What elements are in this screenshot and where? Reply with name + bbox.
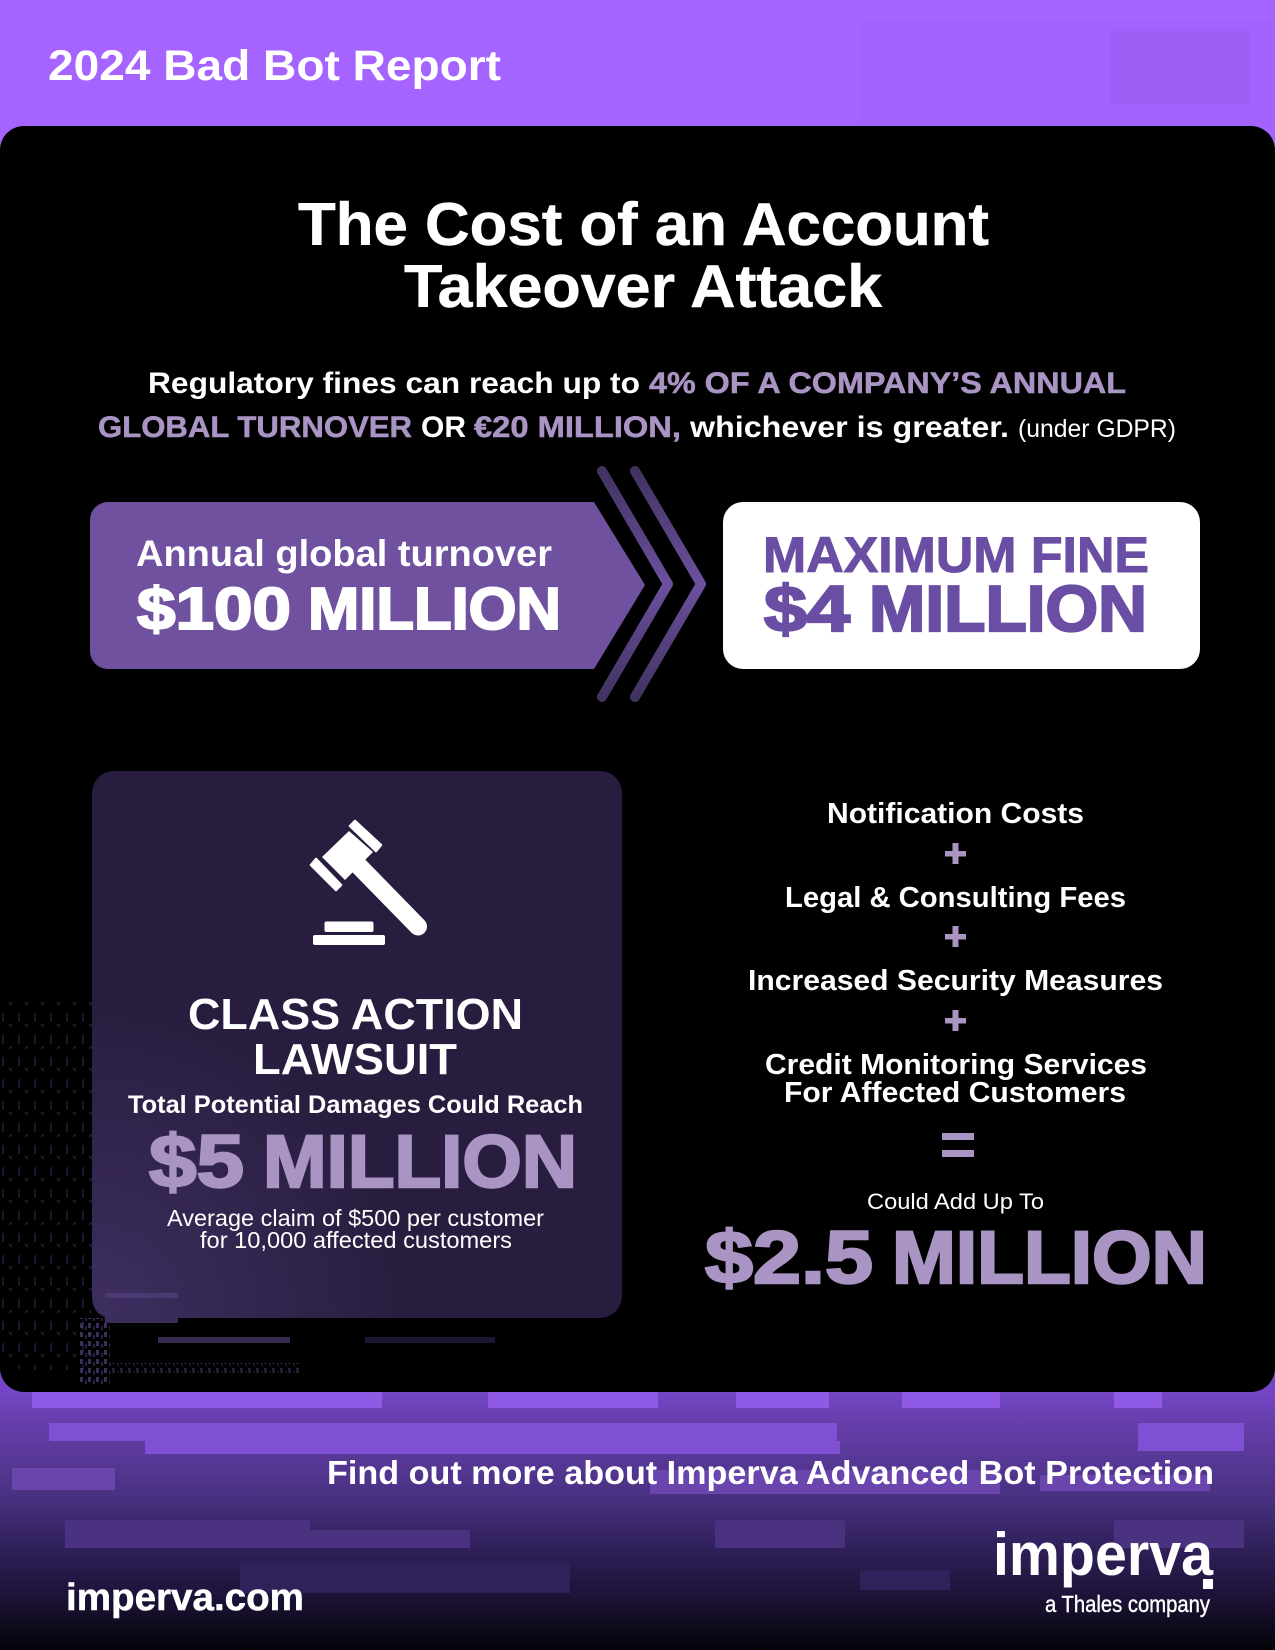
callout: maximum fine	[723, 502, 1200, 669]
regulatory fines statement: GLOBAL TURNOVER	[98, 411, 412, 444]
icon: gavel	[311, 821, 418, 945]
callout: maximum fine: MILLION	[869, 572, 1147, 645]
logo: imperva: imperva	[993, 1521, 1214, 1588]
footer glitch background	[0, 1360, 1275, 1650]
item: credit monitoring services: Credit Monitoring Services	[765, 1049, 1147, 1081]
main black panel	[0, 126, 1275, 1392]
regulatory fines statement: OR	[421, 411, 466, 444]
plus sign	[945, 1010, 966, 1031]
arrow: annual global turnover: Annual global turnover	[136, 533, 552, 574]
lawsuit heading	[188, 990, 523, 1084]
regulatory fines statement: (under GDPR)	[1018, 415, 1176, 443]
damages subheading: Total Potential Damages Could Reach	[128, 1091, 583, 1119]
arrow: annual global turnover	[90, 502, 645, 669]
damages note: Average claim of $500 per customer	[167, 1205, 544, 1231]
footer url: imperva.com	[66, 1577, 304, 1619]
icon: double chevron arrow	[602, 471, 701, 697]
regulatory fines statement: €20 MILLION,	[474, 411, 681, 444]
regulatory fines statement: whichever is greater.	[689, 411, 1009, 444]
item: credit monitoring services	[765, 1049, 1147, 1109]
total figure	[705, 1216, 1207, 1299]
regulatory fines statement: Regulatory fines can reach up to	[148, 367, 640, 400]
regulatory fines statement	[98, 367, 1176, 444]
item: increased security measures: Increased Security Measures	[748, 965, 1163, 997]
main heading: The Cost of an Account	[298, 191, 989, 258]
damages figure: $5	[149, 1120, 244, 1203]
main heading: Takeover Attack	[404, 253, 883, 320]
equals sign	[942, 1133, 974, 1157]
item: legal and consulting fees: Legal & Consulting Fees	[785, 882, 1126, 914]
top purple band	[0, 0, 1275, 170]
item: credit monitoring services: For Affected Customers	[784, 1077, 1126, 1109]
callout: maximum fine: MAXIMUM FINE	[763, 527, 1149, 583]
logo: imperva	[993, 1521, 1214, 1617]
total intro: Could Add Up To	[867, 1189, 1044, 1214]
footer call to action: Find out more about Imperva Advanced Bot Protection	[327, 1454, 1214, 1491]
panel: class action lawsuit	[92, 771, 622, 1318]
cost list	[705, 798, 1207, 1299]
lawsuit heading: CLASS ACTION	[188, 990, 523, 1039]
damages note	[167, 1205, 544, 1253]
callout: maximum fine: $4	[764, 572, 850, 645]
arrow: annual global turnover: $100	[137, 576, 291, 642]
plus sign	[945, 843, 966, 864]
plus sign	[945, 926, 966, 947]
damages note: for 10,000 affected customers	[200, 1227, 512, 1253]
glitch texture at lower left of black panel	[0, 1000, 495, 1386]
logo: imperva: a Thales company	[1045, 1591, 1210, 1617]
lawsuit heading: LAWSUIT	[253, 1035, 457, 1084]
main heading	[298, 191, 989, 320]
header title: 2024 Bad Bot Report	[48, 42, 501, 90]
damages figure: MILLION	[263, 1120, 577, 1203]
total figure: $2.5	[705, 1216, 873, 1299]
total figure: MILLION	[892, 1216, 1207, 1299]
arrow: annual global turnover: MILLION	[308, 576, 561, 642]
item: notification costs: Notification Costs	[827, 798, 1084, 830]
regulatory fines statement: 4% OF A COMPANY’S ANNUAL	[649, 367, 1126, 400]
